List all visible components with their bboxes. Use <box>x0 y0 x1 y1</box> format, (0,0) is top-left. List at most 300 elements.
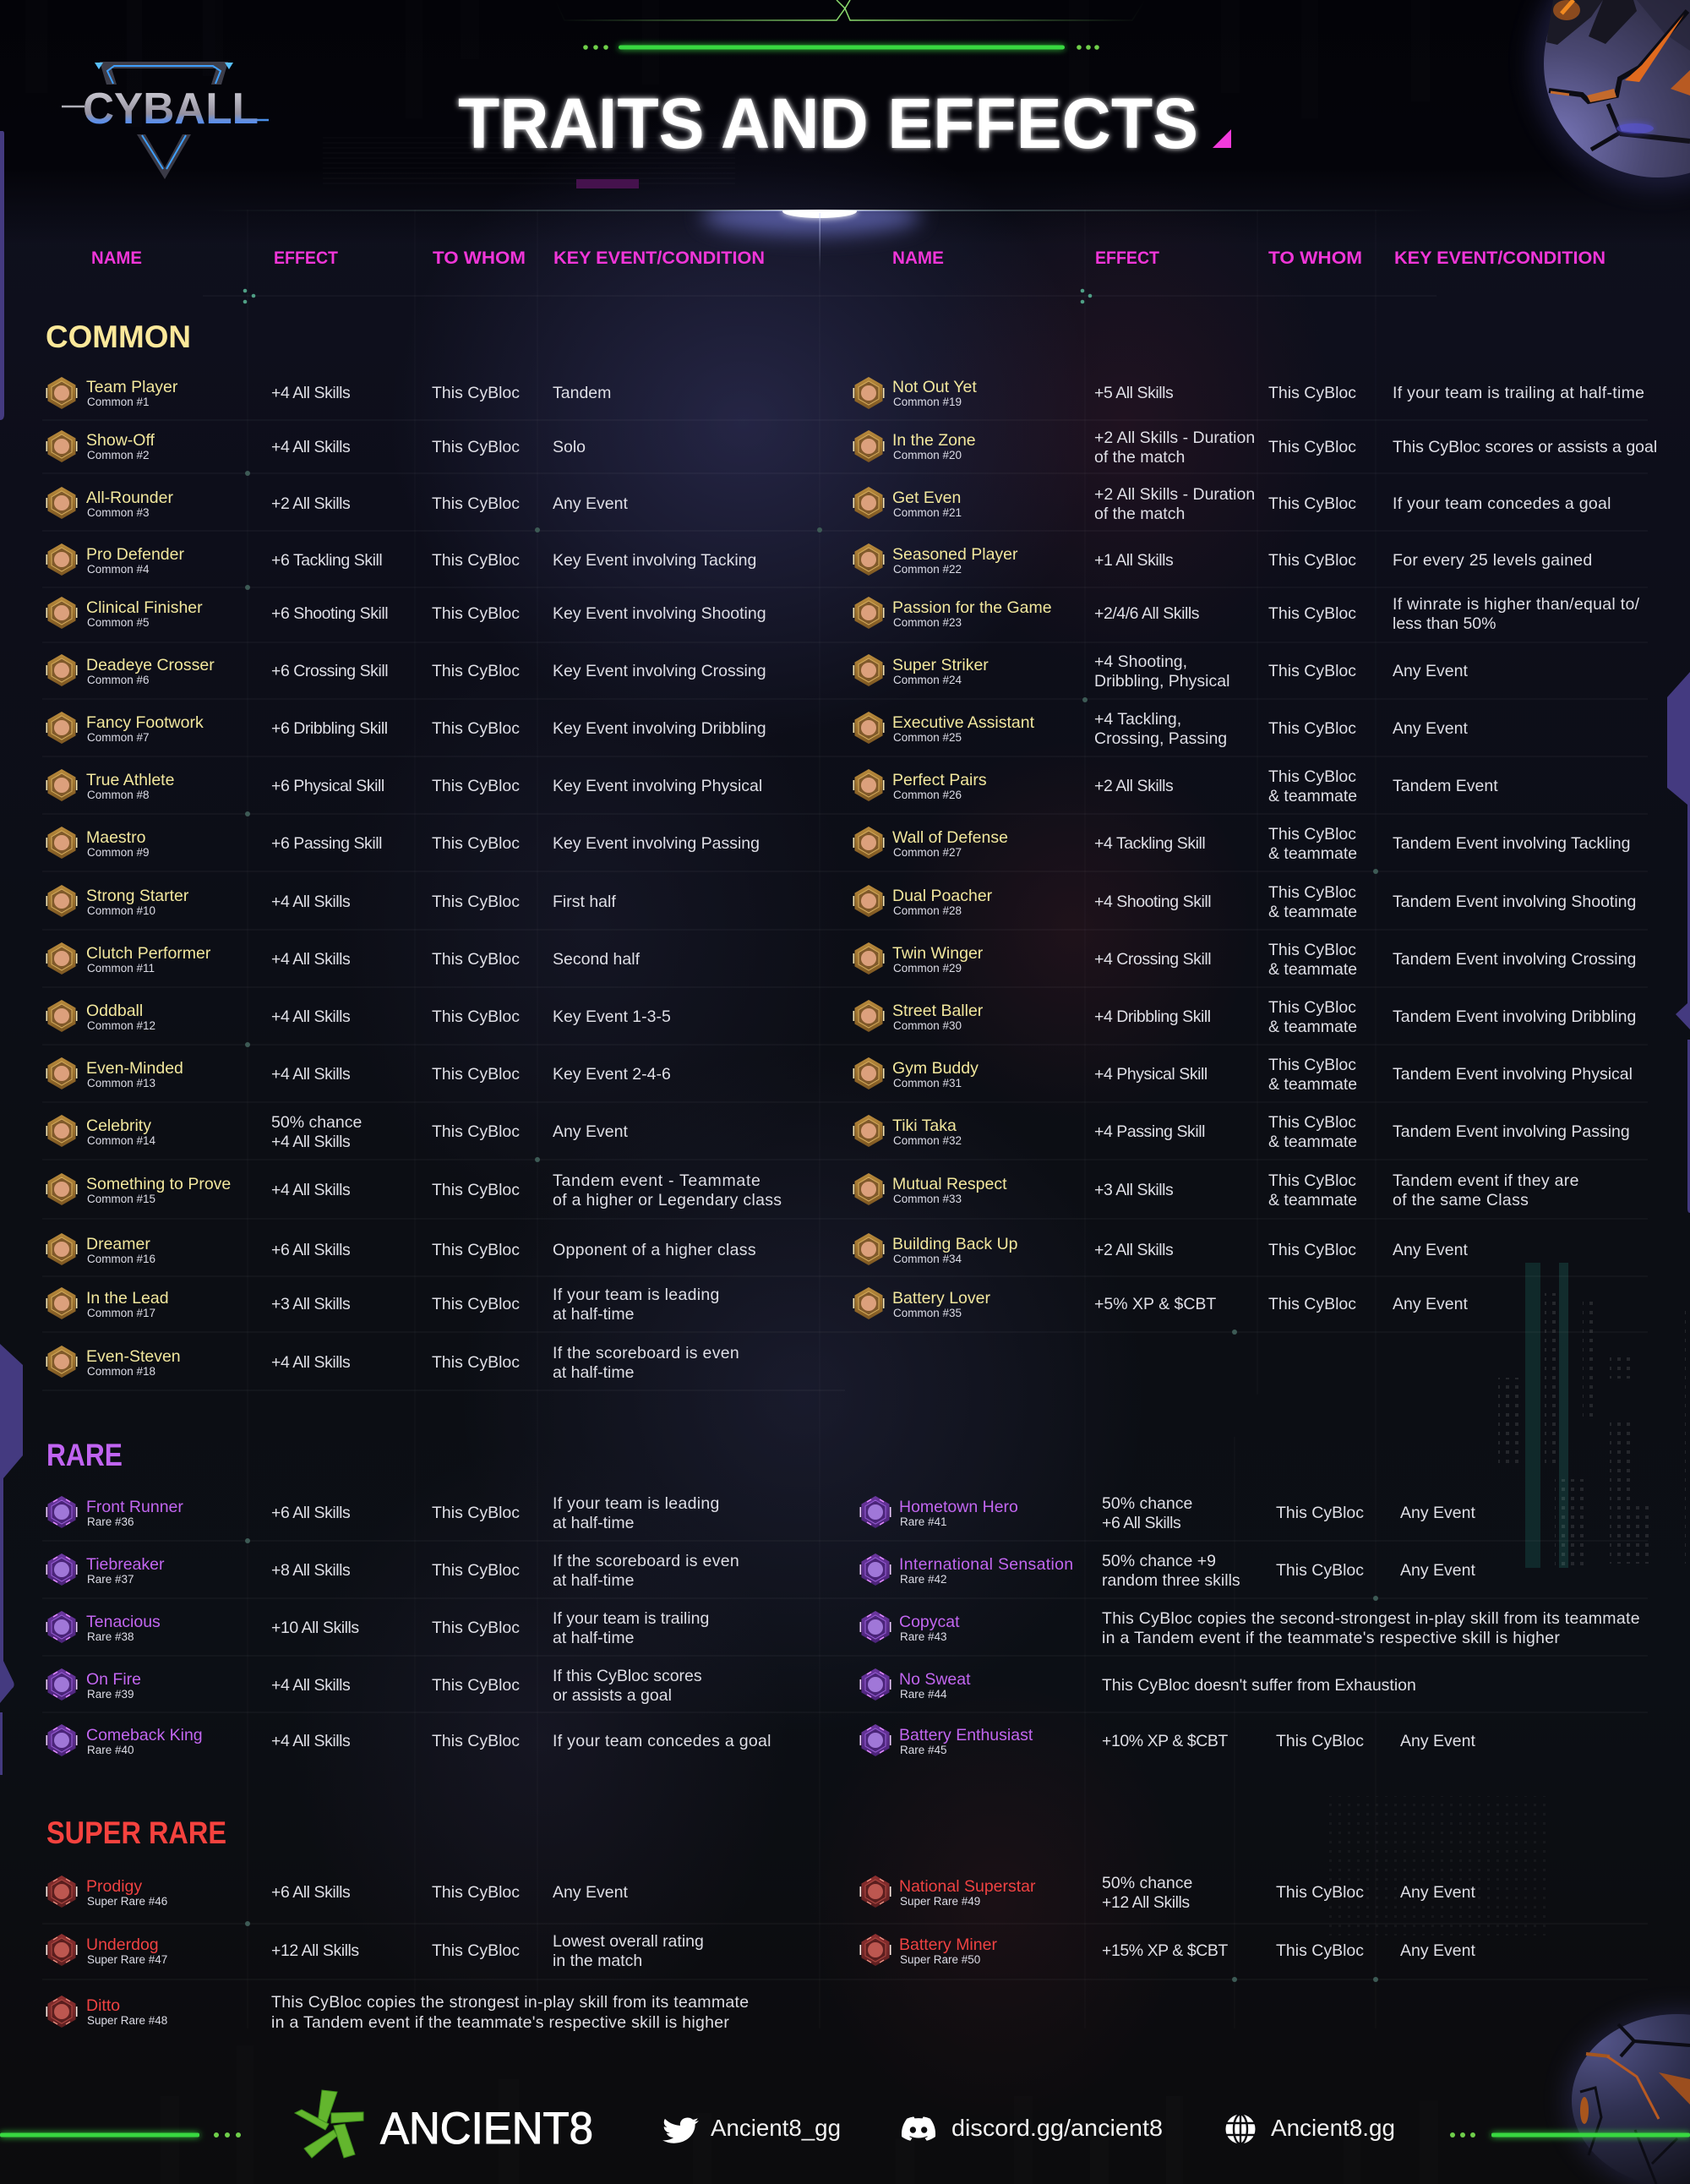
row: Celebrity: Celebrity <box>86 1117 151 1135</box>
table horizontal separators <box>42 296 1648 1979</box>
row: Clutch Performer: This CyBloc <box>432 950 520 969</box>
row: Maestro: Common #9 <box>87 846 150 859</box>
row: Mutual Respect: Tandem event if they are <box>1393 1171 1579 1190</box>
row: Underdog: Underdog <box>86 1936 159 1954</box>
row: Comeback King: +4 All Skills <box>271 1732 351 1750</box>
column headers right: KEY EVENT/CONDITION <box>1394 248 1606 268</box>
row: National Superstar: Super Rare #49 <box>900 1895 980 1908</box>
row: Mutual Respect: +3 All Skills <box>1094 1181 1174 1199</box>
row: True Athlete <box>46 769 762 801</box>
row: True Athlete: Key Event involving Physical <box>553 777 762 795</box>
row: Get Even: Get Even <box>892 489 961 507</box>
row: Battery Miner: Battery Miner <box>899 1936 997 1954</box>
row: Passion for the Game: less than 50% <box>1393 614 1496 633</box>
row: Fancy Footwork: This CyBloc <box>432 719 520 738</box>
row: National Superstar: +12 All Skills <box>1102 1893 1190 1912</box>
row: Executive Assistant: +4 Tackling, <box>1094 710 1181 729</box>
row: International Sensation: 50% chance +9 <box>1102 1552 1216 1570</box>
row: Not Out Yet: Common #19 <box>893 396 962 408</box>
row: Ditto <box>46 1993 749 2032</box>
row: Fancy Footwork <box>46 712 766 744</box>
row: Passion for the Game <box>853 595 1640 633</box>
row: Ditto: Ditto <box>86 1996 120 2015</box>
row: Tenacious: If your team is trailing <box>553 1609 709 1628</box>
column headers left <box>91 248 765 268</box>
icon: discord <box>902 2116 935 2141</box>
row: Wall of Defense: Common #27 <box>893 846 962 859</box>
row: In the Lead: at half-time <box>553 1305 634 1324</box>
row: Battery Miner: +15% XP & $CBT <box>1102 1941 1228 1960</box>
row: Tenacious <box>46 1609 709 1647</box>
row: Battery Enthusiast: Battery Enthusiast <box>899 1726 1033 1744</box>
row: Something to Prove: of a higher or Legendary class <box>553 1191 782 1209</box>
row: Comeback King: This CyBloc <box>432 1732 520 1750</box>
row: Perfect Pairs: This CyBloc <box>1268 767 1356 786</box>
logo: Cyball: CYBALL <box>83 85 259 134</box>
row: Dreamer: +6 All Skills <box>271 1241 351 1259</box>
row: All-Rounder <box>46 487 628 519</box>
row: Hometown Hero <box>860 1494 1475 1532</box>
row: Get Even: This CyBloc <box>1268 494 1356 513</box>
row: Twin Winger: Tandem Event involving Crossing <box>1393 950 1636 969</box>
row: Battery Miner: Super Rare #50 <box>900 1953 980 1966</box>
row: Seasoned Player: For every 25 levels gained <box>1393 551 1593 570</box>
icon: Ancient8 star logo <box>295 2090 363 2158</box>
row: Not Out Yet: This CyBloc <box>1268 384 1356 402</box>
top-right football <box>1531 0 1690 190</box>
row: Battery Enthusiast: This CyBloc <box>1276 1732 1364 1750</box>
row: Twin Winger: +4 Crossing Skill <box>1094 950 1211 969</box>
row: Twin Winger: Common #29 <box>893 962 962 975</box>
row: Tiki Taka: Tiki Taka <box>892 1117 957 1135</box>
row: Dreamer: This CyBloc <box>432 1241 520 1259</box>
bottom-right green bar with dots <box>1450 2132 1690 2138</box>
row: Tiebreaker: at half-time <box>553 1571 634 1590</box>
row: Battery Enthusiast <box>860 1724 1475 1756</box>
row: Battery Lover: Any Event <box>1393 1295 1468 1313</box>
row: In the Lead: In the Lead <box>86 1289 169 1308</box>
row: In the Zone: of the match <box>1094 448 1185 467</box>
row: Tenacious: at half-time <box>553 1629 634 1647</box>
row: Dual Poacher: Tandem Event involving Shooting <box>1393 893 1636 911</box>
row: Team Player: This CyBloc <box>432 384 520 402</box>
row: Battery Enthusiast: Rare #45 <box>900 1744 947 1756</box>
row: Street Baller: This CyBloc <box>1268 998 1356 1017</box>
text: website: Ancient8.gg <box>1271 2115 1395 2141</box>
row: Prodigy <box>46 1876 628 1908</box>
bottom-left green bar with dots <box>0 2132 241 2138</box>
row: Tiki Taka: & teammate <box>1268 1133 1357 1151</box>
row: Get Even: +2 All Skills - Duration <box>1094 485 1255 504</box>
row: Underdog <box>46 1932 704 1970</box>
row: Tiebreaker: This CyBloc <box>432 1561 520 1580</box>
row: True Athlete: This CyBloc <box>432 777 520 795</box>
row: Not Out Yet: +5 All Skills <box>1094 384 1174 402</box>
row: Pro Defender: Key Event involving Tacking <box>553 551 756 570</box>
row: Even-Steven: at half-time <box>553 1363 634 1382</box>
row: In the Lead: Common #17 <box>87 1307 155 1319</box>
row: Tiebreaker: Tiebreaker <box>86 1555 165 1574</box>
row: Celebrity <box>46 1113 628 1151</box>
column headers left: NAME <box>91 248 142 268</box>
row: Dual Poacher: This CyBloc <box>1268 883 1356 902</box>
row: Building Back Up: Building Back Up <box>892 1235 1018 1253</box>
row: Mutual Respect: This CyBloc <box>1268 1171 1356 1190</box>
row: Tiki Taka: Tandem Event involving Passing <box>1393 1122 1630 1141</box>
row: Dreamer: Dreamer <box>86 1235 150 1253</box>
row: Dual Poacher: & teammate <box>1268 903 1357 921</box>
row: Executive Assistant <box>853 710 1468 748</box>
row: International Sensation <box>860 1552 1475 1590</box>
row: Show-Off: +4 All Skills <box>271 438 351 456</box>
grid intersection dots <box>245 471 1378 1982</box>
column headers left: TO WHOM <box>433 248 526 268</box>
row: Wall of Defense <box>853 825 1630 863</box>
row: Tenacious: Tenacious <box>86 1613 161 1631</box>
row: Maestro: This CyBloc <box>432 834 520 853</box>
row: Super Striker: +4 Shooting, <box>1094 652 1187 671</box>
row: Get Even: Common #21 <box>893 506 962 519</box>
row: Deadeye Crosser: This CyBloc <box>432 662 520 680</box>
row: Perfect Pairs: +2 All Skills <box>1094 777 1174 795</box>
row: Copycat <box>860 1609 1640 1647</box>
row: Something to Prove: This CyBloc <box>432 1181 520 1199</box>
row: Underdog: This CyBloc <box>432 1941 520 1960</box>
row: Gym Buddy: This CyBloc <box>1268 1056 1356 1074</box>
row: Hometown Hero: Hometown Hero <box>899 1498 1018 1516</box>
row: Gym Buddy: & teammate <box>1268 1075 1357 1094</box>
row: Wall of Defense: This CyBloc <box>1268 825 1356 844</box>
row: Super Striker: Common #24 <box>893 674 962 686</box>
row: All-Rounder: Any Event <box>553 494 628 513</box>
row: Wall of Defense: Tandem Event involving Tackling <box>1393 834 1630 853</box>
row: Show-Off: Solo <box>553 438 586 456</box>
row: Hometown Hero: Rare #41 <box>900 1515 947 1528</box>
row: Twin Winger: Twin Winger <box>892 944 984 963</box>
row: Comeback King: If your team concedes a goal <box>553 1732 771 1750</box>
row: All-Rounder: +2 All Skills <box>271 494 351 513</box>
icon: twitter <box>662 2117 699 2143</box>
row: Celebrity: 50% chance <box>271 1113 362 1132</box>
row: In the Lead <box>46 1286 720 1324</box>
row: All-Rounder: Common #3 <box>87 506 150 519</box>
row: Clinical Finisher <box>46 597 766 629</box>
row: Gym Buddy <box>853 1056 1633 1094</box>
row: No Sweat: This CyBloc doesn't suffer from Exhaustion <box>1102 1676 1416 1695</box>
heading: Common: COMMON <box>46 319 191 354</box>
row: Perfect Pairs: & teammate <box>1268 787 1357 805</box>
row: Strong Starter: Common #10 <box>87 904 155 917</box>
row: Perfect Pairs: Tandem Event <box>1393 777 1498 795</box>
icon: globe <box>1225 2114 1256 2144</box>
row: Street Baller: Street Baller <box>892 1002 984 1020</box>
row: In the Lead: This CyBloc <box>432 1295 520 1313</box>
row: Show-Off: Common #2 <box>87 449 150 461</box>
row: Strong Starter: +4 All Skills <box>271 893 351 911</box>
row: Deadeye Crosser: Key Event involving Crossing <box>553 662 766 680</box>
row: Front Runner <box>46 1494 720 1532</box>
row: Team Player: Common #1 <box>87 396 150 408</box>
row: Copycat: This CyBloc copies the second-strongest in-play skill from its teammate <box>1102 1609 1640 1628</box>
row: Clinical Finisher: Key Event involving Shooting <box>553 604 766 623</box>
row: Clinical Finisher: This CyBloc <box>432 604 520 623</box>
row: In the Zone: This CyBloc scores or assists a goal <box>1393 438 1657 456</box>
row: Mutual Respect: Common #33 <box>893 1193 962 1205</box>
row: Hometown Hero: This CyBloc <box>1276 1504 1364 1522</box>
row: Tenacious: This CyBloc <box>432 1619 520 1637</box>
row: Seasoned Player <box>853 543 1593 576</box>
row: Hometown Hero: Any Event <box>1400 1504 1475 1522</box>
row: National Superstar: 50% chance <box>1102 1874 1192 1892</box>
row: Get Even: If your team concedes a goal <box>1393 494 1611 513</box>
row: Something to Prove <box>46 1171 782 1209</box>
row: Dual Poacher: Dual Poacher <box>892 887 993 905</box>
row: Tiebreaker <box>46 1552 739 1590</box>
icon: title triangle accent <box>1213 129 1231 148</box>
row: Team Player <box>46 377 611 409</box>
row: Pro Defender <box>46 543 756 576</box>
row: Tiebreaker: If the scoreboard is even <box>553 1552 739 1570</box>
row: Maestro: Maestro <box>86 828 146 847</box>
row: Team Player: Team Player <box>86 378 178 396</box>
row: Prodigy: Prodigy <box>86 1877 142 1896</box>
top flare and divider <box>270 210 1369 267</box>
row: Street Baller: +4 Dribbling Skill <box>1094 1007 1211 1026</box>
row: Not Out Yet: Not Out Yet <box>892 378 977 396</box>
row: Tiki Taka <box>853 1113 1630 1151</box>
row: Celebrity: Any Event <box>553 1122 628 1141</box>
row: Comeback King: Rare #40 <box>87 1744 134 1756</box>
row: Clinical Finisher: +6 Shooting Skill <box>271 604 388 623</box>
row: All-Rounder: All-Rounder <box>86 489 173 507</box>
row: Oddball <box>46 1000 671 1032</box>
row: Clinical Finisher: Clinical Finisher <box>86 598 203 617</box>
row: International Sensation: This CyBloc <box>1276 1561 1364 1580</box>
row: Mutual Respect: Mutual Respect <box>892 1175 1007 1193</box>
row: Even-Steven: If the scoreboard is even <box>553 1344 739 1362</box>
row: Copycat: Copycat <box>899 1613 960 1631</box>
row: Underdog: in the match <box>553 1952 642 1970</box>
row: Clutch Performer: Clutch Performer <box>86 944 211 963</box>
row: Copycat: in a Tandem event if the teammate's respective skill is higher <box>1102 1629 1560 1647</box>
row: Maestro: Key Event involving Passing <box>553 834 760 853</box>
row: Battery Enthusiast: +10% XP & $CBT <box>1102 1732 1228 1750</box>
row: Strong Starter: This CyBloc <box>432 893 520 911</box>
row: Oddball: +4 All Skills <box>271 1007 351 1026</box>
row: On Fire: If this CyBloc scores <box>553 1667 702 1685</box>
row: Perfect Pairs: Common #26 <box>893 789 962 801</box>
row: On Fire: or assists a goal <box>553 1686 672 1705</box>
row: Street Baller: Common #30 <box>893 1019 962 1032</box>
row: Underdog: +12 All Skills <box>271 1941 359 1960</box>
row: Battery Lover: This CyBloc <box>1268 1295 1356 1313</box>
row: Copycat: Rare #43 <box>900 1630 947 1643</box>
row: Passion for the Game: +2/4/6 All Skills <box>1094 604 1200 623</box>
row: Gym Buddy: +4 Physical Skill <box>1094 1065 1208 1084</box>
left edge purple bracket shapes <box>0 131 23 1775</box>
row: Mutual Respect: & teammate <box>1268 1191 1357 1209</box>
row: Gym Buddy: Common #31 <box>893 1077 962 1089</box>
row: In the Zone: In the Zone <box>892 431 976 450</box>
row: Tiki Taka: This CyBloc <box>1268 1113 1356 1132</box>
row: Perfect Pairs: Perfect Pairs <box>892 771 987 789</box>
heading: Rare: RARE <box>46 1438 123 1472</box>
title: TRAITS AND EFFECTS <box>458 84 1198 163</box>
row: Gym Buddy: Tandem Event involving Physical <box>1393 1065 1633 1084</box>
row: Wall of Defense: +4 Tackling Skill <box>1094 834 1205 853</box>
row: Twin Winger <box>853 941 1636 979</box>
row: Maestro: +6 Passing Skill <box>271 834 382 853</box>
row: Street Baller <box>853 998 1636 1036</box>
row: Street Baller: & teammate <box>1268 1018 1357 1036</box>
row: Wall of Defense: Wall of Defense <box>892 828 1008 847</box>
row: Even-Minded <box>46 1057 671 1089</box>
row: Even-Steven: +4 All Skills <box>271 1353 351 1372</box>
row: True Athlete: True Athlete <box>86 771 174 789</box>
text: discord link: discord.gg/ancient8 <box>951 2115 1163 2141</box>
row: In the Lead: +3 All Skills <box>271 1295 351 1313</box>
row: Even-Minded: This CyBloc <box>432 1065 520 1084</box>
row: On Fire: +4 All Skills <box>271 1676 351 1695</box>
row: Front Runner: This CyBloc <box>432 1504 520 1522</box>
row: Even-Steven <box>46 1344 739 1382</box>
column headers right: TO WHOM <box>1268 248 1362 268</box>
row: Pro Defender: Common #4 <box>87 563 150 576</box>
row: Super Striker: Any Event <box>1393 662 1468 680</box>
row: Fancy Footwork: +6 Dribbling Skill <box>271 719 388 738</box>
heading: Super Rare: SUPER RARE <box>46 1815 226 1850</box>
row: No Sweat: Rare #44 <box>900 1688 947 1701</box>
row: Underdog: Lowest overall rating <box>553 1932 704 1951</box>
row: Executive Assistant: Common #25 <box>893 731 962 744</box>
row: Passion for the Game: This CyBloc <box>1268 604 1356 623</box>
row: Pro Defender: Pro Defender <box>86 545 184 564</box>
row: Celebrity: Common #14 <box>87 1134 156 1147</box>
text: twitter handle: Ancient8_gg <box>711 2115 841 2141</box>
row: Even-Minded: Even-Minded <box>86 1059 183 1078</box>
row: Pro Defender: This CyBloc <box>432 551 520 570</box>
row: True Athlete: +6 Physical Skill <box>271 777 384 795</box>
row: Oddball: Common #12 <box>87 1019 155 1032</box>
row: International Sensation: random three skills <box>1102 1571 1240 1590</box>
right edge purple bracket shapes <box>1667 672 1690 1213</box>
row: Building Back Up: +2 All Skills <box>1094 1241 1174 1259</box>
row: Clutch Performer: Second half <box>553 950 641 969</box>
row: Fancy Footwork: Fancy Footwork <box>86 713 204 732</box>
row: Passion for the Game: Common #23 <box>893 616 962 629</box>
row: Battery Lover: +5% XP & $CBT <box>1094 1295 1216 1313</box>
header dots <box>243 289 1092 303</box>
row: Get Even <box>853 485 1611 523</box>
row: True Athlete: Common #8 <box>87 789 150 801</box>
row: Twin Winger: & teammate <box>1268 960 1357 979</box>
row: Battery Miner <box>860 1934 1475 1966</box>
row: Twin Winger: This CyBloc <box>1268 941 1356 959</box>
row: Executive Assistant: Executive Assistant <box>892 713 1035 732</box>
row: No Sweat: No Sweat <box>899 1670 971 1689</box>
row: Ditto: Super Rare #48 <box>87 2014 167 2027</box>
row: Fancy Footwork: Common #7 <box>87 731 150 744</box>
row: Building Back Up: Any Event <box>1393 1241 1468 1259</box>
row: Show-Off <box>46 430 586 462</box>
row: Seasoned Player: Common #22 <box>893 563 962 576</box>
row: Tiebreaker: +8 All Skills <box>271 1561 351 1580</box>
row: National Superstar: This CyBloc <box>1276 1883 1364 1902</box>
row: Wall of Defense: & teammate <box>1268 844 1357 863</box>
row: Ditto: This CyBloc copies the strongest in-play skill from its teammate <box>271 1993 749 2012</box>
row: Front Runner: If your team is leading <box>553 1494 720 1513</box>
row: On Fire: This CyBloc <box>432 1676 520 1695</box>
row: Battery Lover <box>853 1287 1468 1319</box>
row: Mutual Respect: of the same Class <box>1393 1191 1529 1209</box>
row: Even-Steven: Even-Steven <box>86 1347 181 1366</box>
row: Super Striker: This CyBloc <box>1268 662 1356 680</box>
column headers right: EFFECT <box>1095 248 1159 268</box>
row: Something to Prove: Common #15 <box>87 1193 155 1205</box>
row: Seasoned Player: +1 All Skills <box>1094 551 1174 570</box>
row: In the Lead: If your team is leading <box>553 1286 720 1304</box>
row: Gym Buddy: Gym Buddy <box>892 1059 979 1078</box>
row: Comeback King <box>46 1724 771 1756</box>
row: Not Out Yet: If your team is trailing at half-time <box>1393 384 1644 402</box>
row: Fancy Footwork: Key Event involving Dribbling <box>553 719 766 738</box>
row: Celebrity: +4 All Skills <box>271 1133 351 1151</box>
row: In the Zone: +2 All Skills - Duration <box>1094 429 1255 447</box>
row: International Sensation: Rare #42 <box>900 1573 947 1586</box>
row: Oddball: Oddball <box>86 1002 143 1020</box>
row: Even-Steven: This CyBloc <box>432 1353 520 1372</box>
row: Something to Prove: +4 All Skills <box>271 1181 351 1199</box>
row: Clutch Performer: +4 All Skills <box>271 950 351 969</box>
row: National Superstar <box>860 1874 1475 1912</box>
row: In the Zone <box>853 429 1657 467</box>
row: Dual Poacher: +4 Shooting Skill <box>1094 893 1211 911</box>
row: Passion for the Game: If winrate is higher than/equal to/ <box>1393 595 1640 614</box>
row: Front Runner: at half-time <box>553 1514 634 1532</box>
row: National Superstar: Any Event <box>1400 1883 1475 1902</box>
row: National Superstar: National Superstar <box>899 1877 1036 1896</box>
row: Deadeye Crosser: Deadeye Crosser <box>86 656 215 674</box>
row: Pro Defender: +6 Tackling Skill <box>271 551 382 570</box>
row: Comeback King: Comeback King <box>86 1726 203 1744</box>
row: Building Back Up: Common #34 <box>893 1253 962 1265</box>
row: Deadeye Crosser: +6 Crossing Skill <box>271 662 388 680</box>
column headers left: EFFECT <box>274 248 338 268</box>
row: Battery Miner: Any Event <box>1400 1941 1475 1960</box>
row: Oddball: Key Event 1-3-5 <box>553 1007 671 1026</box>
row: Tenacious: Rare #38 <box>87 1630 134 1643</box>
row: Battery Lover: Battery Lover <box>892 1289 990 1308</box>
row: Strong Starter: Strong Starter <box>86 887 189 905</box>
column headers left: KEY EVENT/CONDITION <box>553 248 765 268</box>
row: Celebrity: This CyBloc <box>432 1122 520 1141</box>
row: Executive Assistant: This CyBloc <box>1268 719 1356 738</box>
row: Dual Poacher: Common #28 <box>893 904 962 917</box>
row: Even-Minded: +4 All Skills <box>271 1065 351 1084</box>
row: Tiebreaker: Rare #37 <box>87 1573 134 1586</box>
background dot grids and teal bars <box>323 135 1690 1936</box>
row: No Sweat <box>860 1668 1416 1701</box>
row: Perfect Pairs <box>853 767 1498 805</box>
row: Seasoned Player: This CyBloc <box>1268 551 1356 570</box>
row: Team Player: +4 All Skills <box>271 384 351 402</box>
row: Not Out Yet <box>853 377 1644 409</box>
row: On Fire <box>46 1667 702 1705</box>
row: Battery Miner: This CyBloc <box>1276 1941 1364 1960</box>
row: Even-Minded: Common #13 <box>87 1077 155 1089</box>
row: Super Striker: Dribbling, Physical <box>1094 672 1229 691</box>
row: Strong Starter <box>46 885 616 917</box>
